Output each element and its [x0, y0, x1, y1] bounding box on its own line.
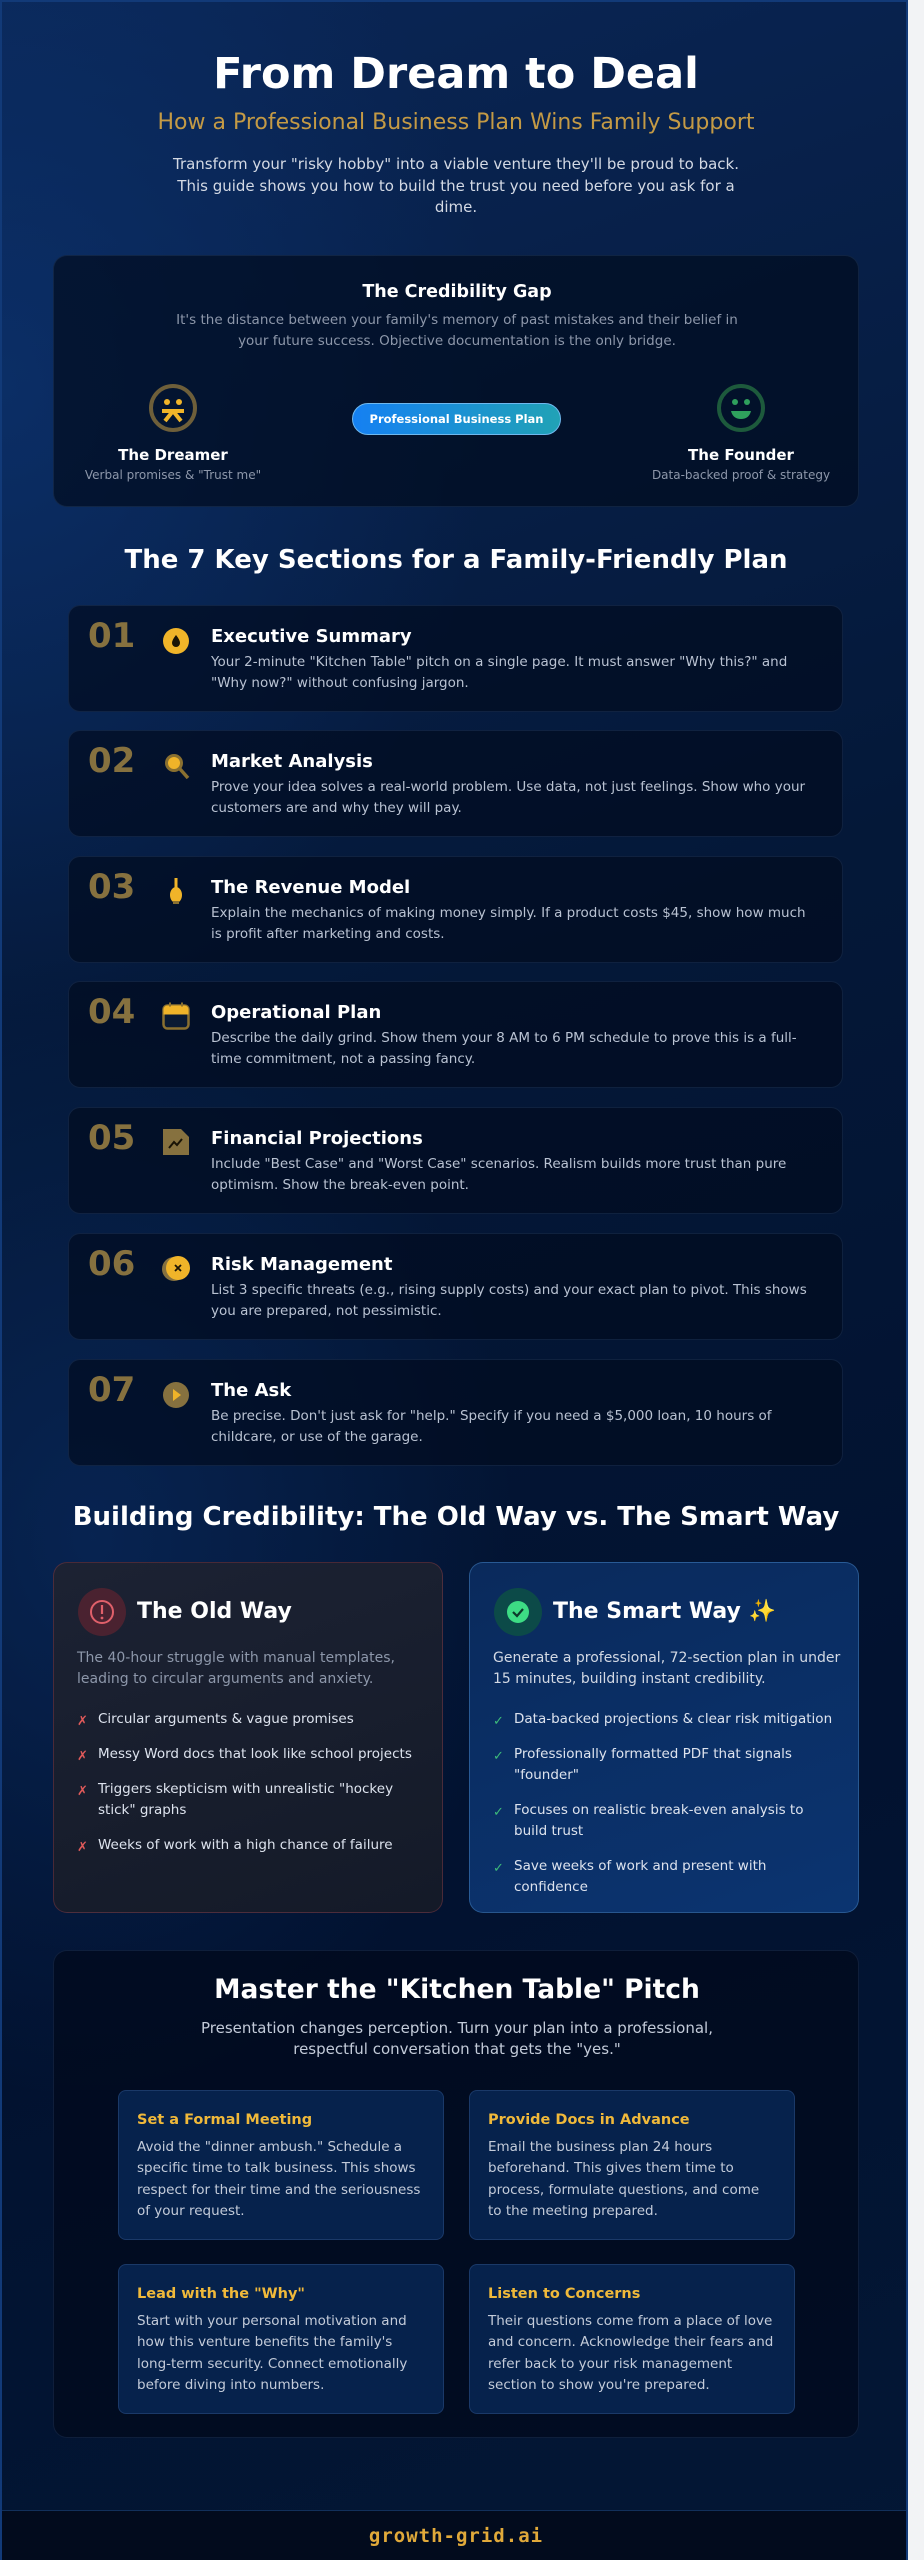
card: 02 market analysis: Market Analysis	[211, 751, 373, 772]
card: 02 market analysis: Prove your idea solves a real-world problem. Use data, not just feelings. Show who your customers are and why they will pay.	[211, 779, 805, 816]
card: 01 executive summary	[68, 605, 843, 712]
icon: bulb	[170, 878, 182, 904]
card: 03 revenue model: The Revenue Model	[211, 877, 410, 898]
list: old way drawbacks: Triggers skepticism with unrealistic "hockey stick" graphs	[98, 1781, 393, 1818]
card: 01 executive summary: Your 2-minute "Kitchen Table" pitch on a single page. It must answer "Why this?" and "Why now?" without confusing jargon.	[211, 654, 787, 691]
tip: set a formal meeting: Set a Formal Meeting	[137, 2112, 312, 2128]
list: smart way benefits: Data-backed projections & clear risk mitigation	[514, 1711, 832, 1727]
panel: the smart way	[469, 1562, 859, 1913]
icon: magnifier	[165, 754, 190, 779]
card: 02 market analysis	[68, 730, 843, 837]
card: 05 financial projections: Financial Projections	[211, 1128, 423, 1149]
tip: provide docs in advance: Email the business plan 24 hours beforehand. This gives them time to process, formulate questions, and come to the meeting prepared.	[488, 2139, 759, 2219]
tip: lead with the why	[118, 2264, 444, 2414]
icon: chart document	[163, 1129, 189, 1155]
card: 06 risk management	[68, 1233, 843, 1340]
card: 06 risk management: List 3 specific threats (e.g., rising supply costs) and your exact plan to pivot. This shows you are prepared, not pessimistic.	[211, 1282, 807, 1319]
list: old way drawbacks: ✗	[77, 1749, 88, 1764]
tip: set a formal meeting	[118, 2090, 444, 2240]
card: 07 the ask	[68, 1359, 843, 1466]
icon: dreamer face	[149, 384, 197, 432]
tip: lead with the why: Lead with the "Why"	[137, 2286, 305, 2302]
card: 02 market analysis: 02	[88, 741, 135, 781]
footer: growth-grid.ai	[369, 2525, 543, 2547]
card: 04 operational plan: Describe the daily grind. Show them your 8 AM to 6 PM schedule to prove this is a full-time commitment, not a passing fancy.	[211, 1030, 797, 1067]
card: 06 risk management: 06	[88, 1244, 135, 1284]
card: 01 executive summary: 01	[88, 616, 135, 656]
list: old way drawbacks	[77, 1711, 412, 1855]
list: old way drawbacks: Weeks of work with a high chance of failure	[98, 1837, 393, 1853]
card: 04 operational plan: Operational Plan	[211, 1002, 381, 1023]
text: smart way description: Generate a professional, 72-section plan in under 15 minutes, building instant credibility.	[493, 1650, 840, 1687]
list: old way drawbacks: Circular arguments & vague promises	[98, 1711, 354, 1727]
list: old way drawbacks: ✗	[77, 1784, 88, 1799]
panel: the old way	[53, 1562, 443, 1913]
text: old way description: The 40-hour struggle with manual templates, leading to circular arguments and anxiety.	[77, 1650, 395, 1687]
icon: check	[494, 1588, 542, 1636]
tip: lead with the why: Start with your personal motivation and how this venture benefits the family's long-term security. Connect emotionally before diving into numbers.	[137, 2313, 407, 2393]
icon: founder face	[717, 384, 765, 432]
card: 04 operational plan	[68, 981, 843, 1088]
label: the dreamer	[85, 446, 261, 482]
card: 05 financial projections: 05	[88, 1118, 135, 1158]
list: smart way benefits: ✓	[493, 1861, 504, 1876]
heading: kitchen table pitch: Master the "Kitchen Table" Pitch	[214, 1974, 700, 2005]
pill: professional business plan	[352, 403, 561, 435]
card: 03 revenue model: 03	[88, 867, 135, 907]
text: pitch intro: Presentation changes perception. Turn your plan into a professional, respectful conversation that gets the "yes."	[201, 2019, 713, 2058]
panel: kitchen table pitch	[53, 1950, 859, 2438]
list: smart way benefits: Save weeks of work and present with confidence	[514, 1858, 766, 1895]
icon: coin	[163, 628, 189, 654]
card: 04 operational plan: 04	[88, 992, 135, 1032]
icon: play	[163, 1382, 189, 1408]
list: smart way benefits: Focuses on realistic break-even analysis to build trust	[514, 1802, 803, 1839]
card: 03 revenue model: Explain the mechanics of making money simply. If a product costs $45, show how much is profit after marketing and costs.	[211, 905, 806, 942]
subtitle: How a Professional Business Plan Wins Family Support	[157, 110, 754, 135]
heading: building credibility: Building Credibility: The Old Way vs. The Smart Way	[73, 1502, 839, 1532]
list: old way drawbacks: ✗	[77, 1840, 88, 1855]
tip: listen to concerns: Their questions come from a place of love and concern. Acknowledge their fears and refer back to your risk management section to show you're prepared.	[488, 2313, 773, 2393]
tip: set a formal meeting: Avoid the "dinner ambush." Schedule a specific time to talk business. This shows respect for their time and the seriousness of your request.	[137, 2139, 420, 2219]
list: smart way benefits: ✓	[493, 1749, 504, 1764]
tip: listen to concerns	[469, 2264, 795, 2414]
pill: professional business plan: Professional Business Plan	[370, 412, 543, 426]
title: From Dream to Deal	[213, 49, 699, 99]
tip: listen to concerns: Listen to Concerns	[488, 2286, 640, 2302]
list: smart way benefits: Professionally formatted PDF that signals "founder"	[514, 1746, 792, 1783]
list: old way drawbacks: ✗	[77, 1714, 88, 1729]
label: the founder: The Founder	[688, 446, 794, 464]
list: smart way benefits	[493, 1711, 832, 1895]
card: 05 financial projections: Include "Best Case" and "Worst Case" scenarios. Realism builds more trust than pure optimism. Show the break-even point.	[211, 1156, 786, 1193]
tip: provide docs in advance: Provide Docs in Advance	[488, 2112, 690, 2128]
card: 01 executive summary: Executive Summary	[211, 626, 412, 647]
footer	[2, 2510, 910, 2560]
heading: 7 key sections: The 7 Key Sections for a Family-Friendly Plan	[124, 545, 788, 575]
intro text: Transform your "risky hobby" into a viable venture they'll be proud to back. This guide shows you how to build the trust you need before you ask for a dime.	[173, 155, 739, 216]
label: the founder: Data-backed proof & strategy	[652, 468, 830, 482]
card: 07 the ask: Be precise. Don't just ask for "help." Specify if you need a $5,000 loan, 10 hours of childcare, or use of the garage.	[211, 1408, 772, 1445]
heading: the smart way: The Smart Way ✨	[553, 1599, 776, 1624]
list: old way drawbacks: Messy Word docs that look like school projects	[98, 1746, 412, 1762]
card: 06 risk management: Risk Management	[211, 1254, 392, 1275]
label: the dreamer: The Dreamer	[118, 446, 228, 464]
panel: credibility gap	[53, 255, 859, 507]
text: gap description: It's the distance between your family's memory of past mistakes and their belief in your future success. Objective documentation is the only bridge.	[176, 312, 738, 349]
label: the dreamer: Verbal promises & "Trust me"	[85, 468, 261, 482]
heading: the old way: The Old Way	[137, 1599, 292, 1624]
list: smart way benefits: ✓	[493, 1714, 504, 1729]
list: smart way benefits: ✓	[493, 1805, 504, 1820]
card: 03 revenue model	[68, 856, 843, 963]
card: 07 the ask: The Ask	[211, 1380, 291, 1401]
card: 05 financial projections	[68, 1107, 843, 1214]
icon: calendar	[162, 1002, 190, 1030]
tip: provide docs in advance	[469, 2090, 795, 2240]
label: the founder	[652, 446, 830, 482]
card: 07 the ask: 07	[88, 1370, 135, 1410]
icon: warning	[78, 1588, 126, 1636]
icon: risk coin	[162, 1256, 190, 1281]
heading: credibility gap: The Credibility Gap	[362, 282, 552, 302]
